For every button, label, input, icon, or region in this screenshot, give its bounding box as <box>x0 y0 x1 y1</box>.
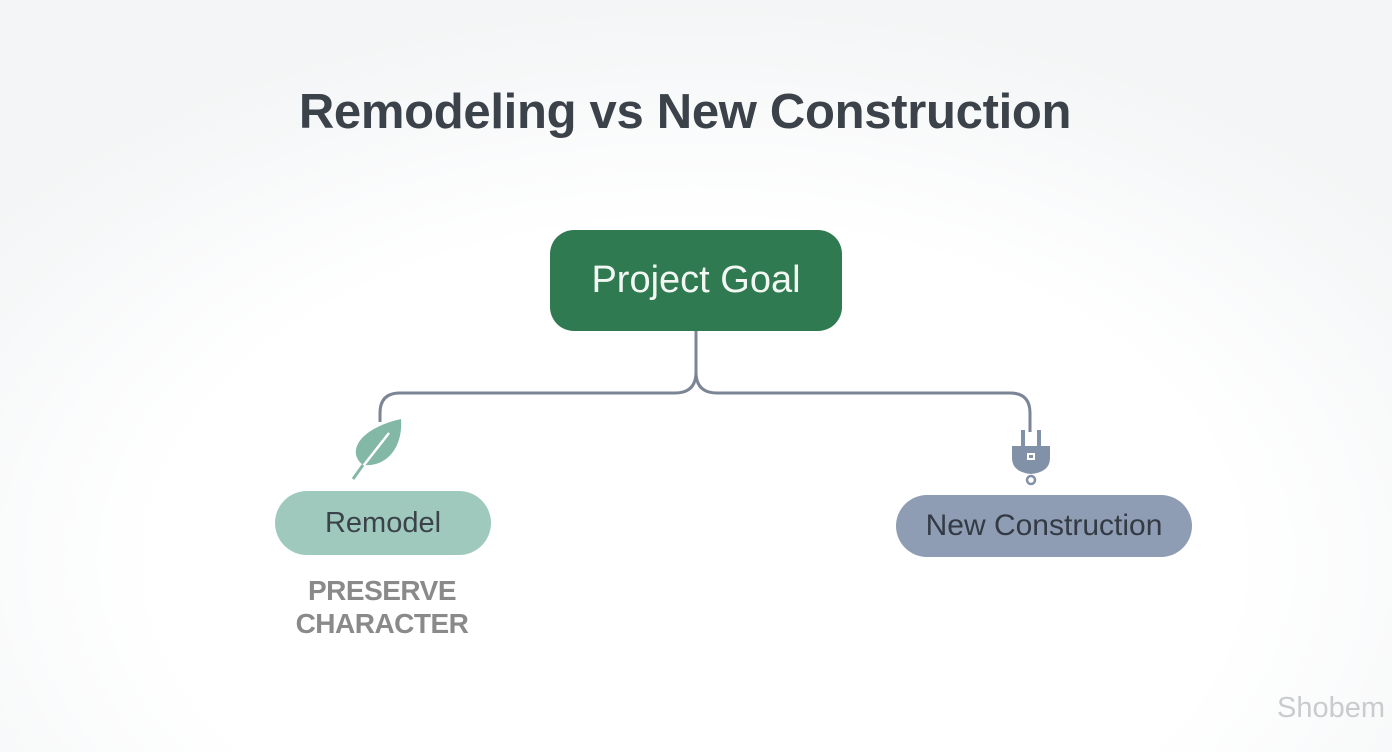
box: project goal <box>550 230 842 331</box>
pill: new construction <box>896 495 1192 557</box>
text: preserve character <box>296 575 468 639</box>
pill: remodel <box>275 491 491 555</box>
icon: plug <box>1012 430 1050 486</box>
watermark: Shobem <box>1277 692 1385 724</box>
text: preserve character: CHARACTER <box>296 608 468 639</box>
pill: remodel: Remodel <box>325 507 441 539</box>
title: Remodeling vs New Construction <box>299 85 1071 139</box>
icon: leaf <box>352 419 402 480</box>
text: preserve character: PRESERVE <box>308 575 456 606</box>
box: project goal: Project Goal <box>591 259 801 301</box>
pill: new construction: New Construction <box>926 509 1162 542</box>
